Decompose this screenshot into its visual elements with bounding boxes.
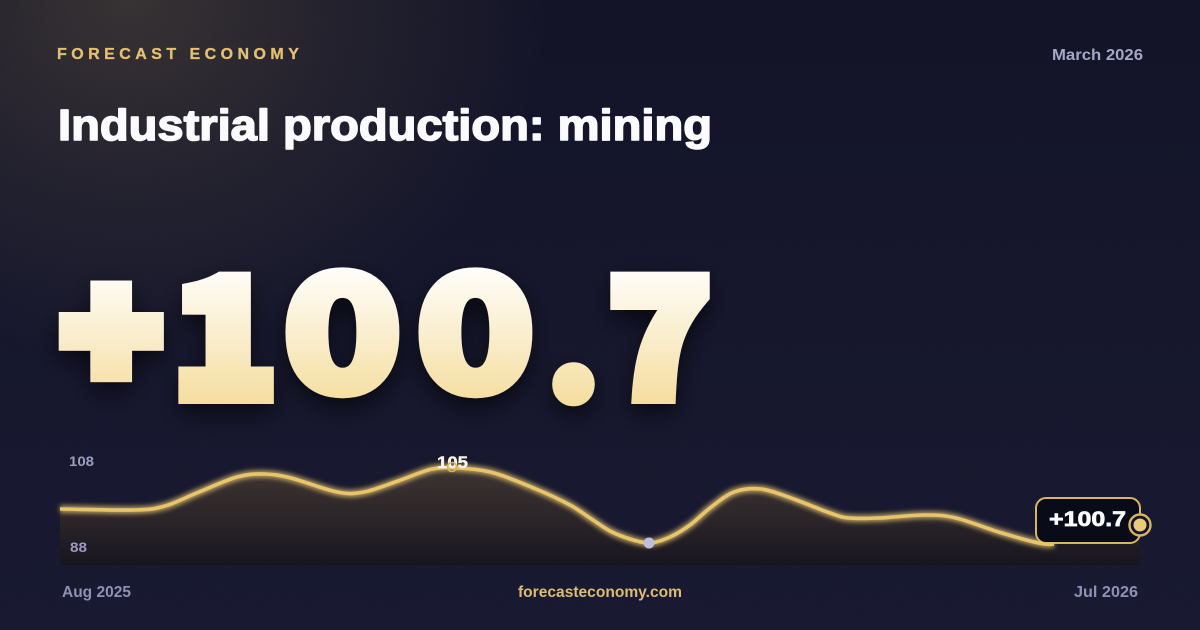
headline value: . — [545, 211, 602, 447]
line chart — [60, 453, 1150, 565]
headline value: 7 — [609, 209, 711, 444]
peak marker — [448, 462, 456, 472]
low point marker — [644, 538, 654, 548]
end date: Jul 2026 — [1074, 584, 1138, 601]
headline value: + — [63, 215, 159, 432]
line glow — [60, 467, 1054, 544]
headline value — [63, 204, 711, 447]
start date: Aug 2025 — [62, 584, 131, 601]
headline value: 1 — [172, 209, 277, 445]
axis max label: 108 — [69, 453, 94, 469]
value callout: +100.7 — [1049, 507, 1126, 531]
brand label: FORECAST ECONOMY — [57, 46, 303, 63]
headline value: 0 — [415, 204, 536, 440]
area under line — [60, 467, 1140, 565]
end point marker — [1130, 514, 1150, 536]
axis min label: 88 — [70, 539, 87, 555]
website: forecasteconomy.com — [518, 584, 682, 601]
title: Industrial production: mining — [58, 101, 712, 150]
value callout — [1036, 498, 1140, 543]
line — [60, 467, 1054, 544]
peak label: 105 — [437, 453, 468, 472]
date: March 2026 — [1052, 47, 1143, 64]
headline value: 0 — [282, 204, 403, 440]
